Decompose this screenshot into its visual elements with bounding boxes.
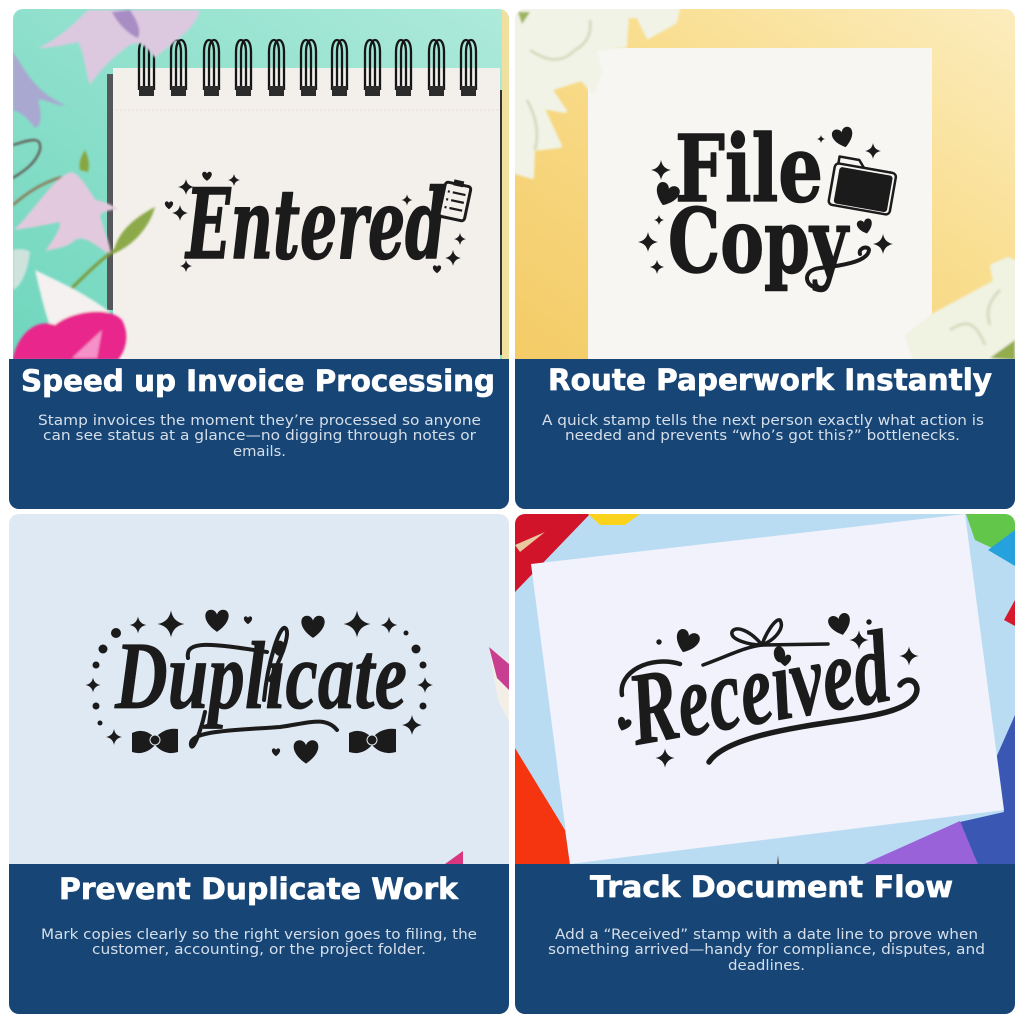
stamp: Duplicate: Duplicate	[114, 622, 407, 729]
body text: emails.	[233, 444, 286, 460]
panel: route paperwork	[515, 9, 1015, 509]
body text: can see status at a glance—no digging through notes or	[43, 428, 476, 444]
panel: track document flow	[515, 514, 1015, 1014]
caption band	[9, 864, 509, 1014]
stamp: File Copy: File	[675, 115, 823, 223]
stamp: Received: Received	[619, 609, 899, 768]
body text	[542, 413, 984, 444]
body text	[38, 413, 481, 460]
panel: invoice processing	[9, 9, 509, 509]
stamp: File Copy	[638, 115, 898, 293]
body text: A quick stamp tells the next person exactly what action is	[542, 413, 984, 429]
stamp: Entered	[165, 168, 472, 281]
body text: customer, accounting, or the project folder.	[92, 942, 426, 958]
photo: pale paper with coloured pencils	[9, 514, 509, 865]
body text: something arrived—handy for compliance, disputes, and	[548, 942, 985, 958]
panel: prevent duplicate work	[9, 514, 509, 1014]
photo: tilted paper on colourful stationery	[515, 514, 1015, 865]
heading: Route Paperwork Instantly	[548, 363, 992, 397]
icon: clipboard	[439, 178, 472, 221]
body text	[548, 927, 985, 974]
icon: folder	[828, 156, 898, 215]
body text: Mark copies clearly so the right version goes to filing, the	[41, 927, 477, 943]
body text: Add a “Received” stamp with a date line to prove when	[555, 927, 978, 943]
heading: Prevent Duplicate Work	[59, 872, 459, 906]
body text: needed and prevents “who’s got this?” bottlenecks.	[565, 428, 960, 444]
stamp: File Copy: Copy	[668, 189, 850, 293]
photo: paper on yellow with white flowers	[515, 9, 1015, 360]
photo: notebook with flowers on teal	[13, 9, 509, 360]
stamp: Entered: Entered	[184, 168, 446, 281]
caption band	[9, 359, 509, 509]
body text: Stamp invoices the moment they’re processed so anyone	[38, 413, 481, 429]
icon: dotted arcs	[92, 628, 426, 726]
icon: bows	[132, 729, 396, 753]
stamp: Received	[615, 609, 918, 768]
stamp: Duplicate	[86, 610, 433, 764]
caption band	[515, 359, 1015, 509]
body text	[41, 927, 477, 958]
heading: Speed up Invoice Processing	[21, 364, 495, 398]
caption band	[515, 864, 1015, 1014]
body text: deadlines.	[728, 958, 805, 974]
heading: Track Document Flow	[590, 870, 953, 904]
